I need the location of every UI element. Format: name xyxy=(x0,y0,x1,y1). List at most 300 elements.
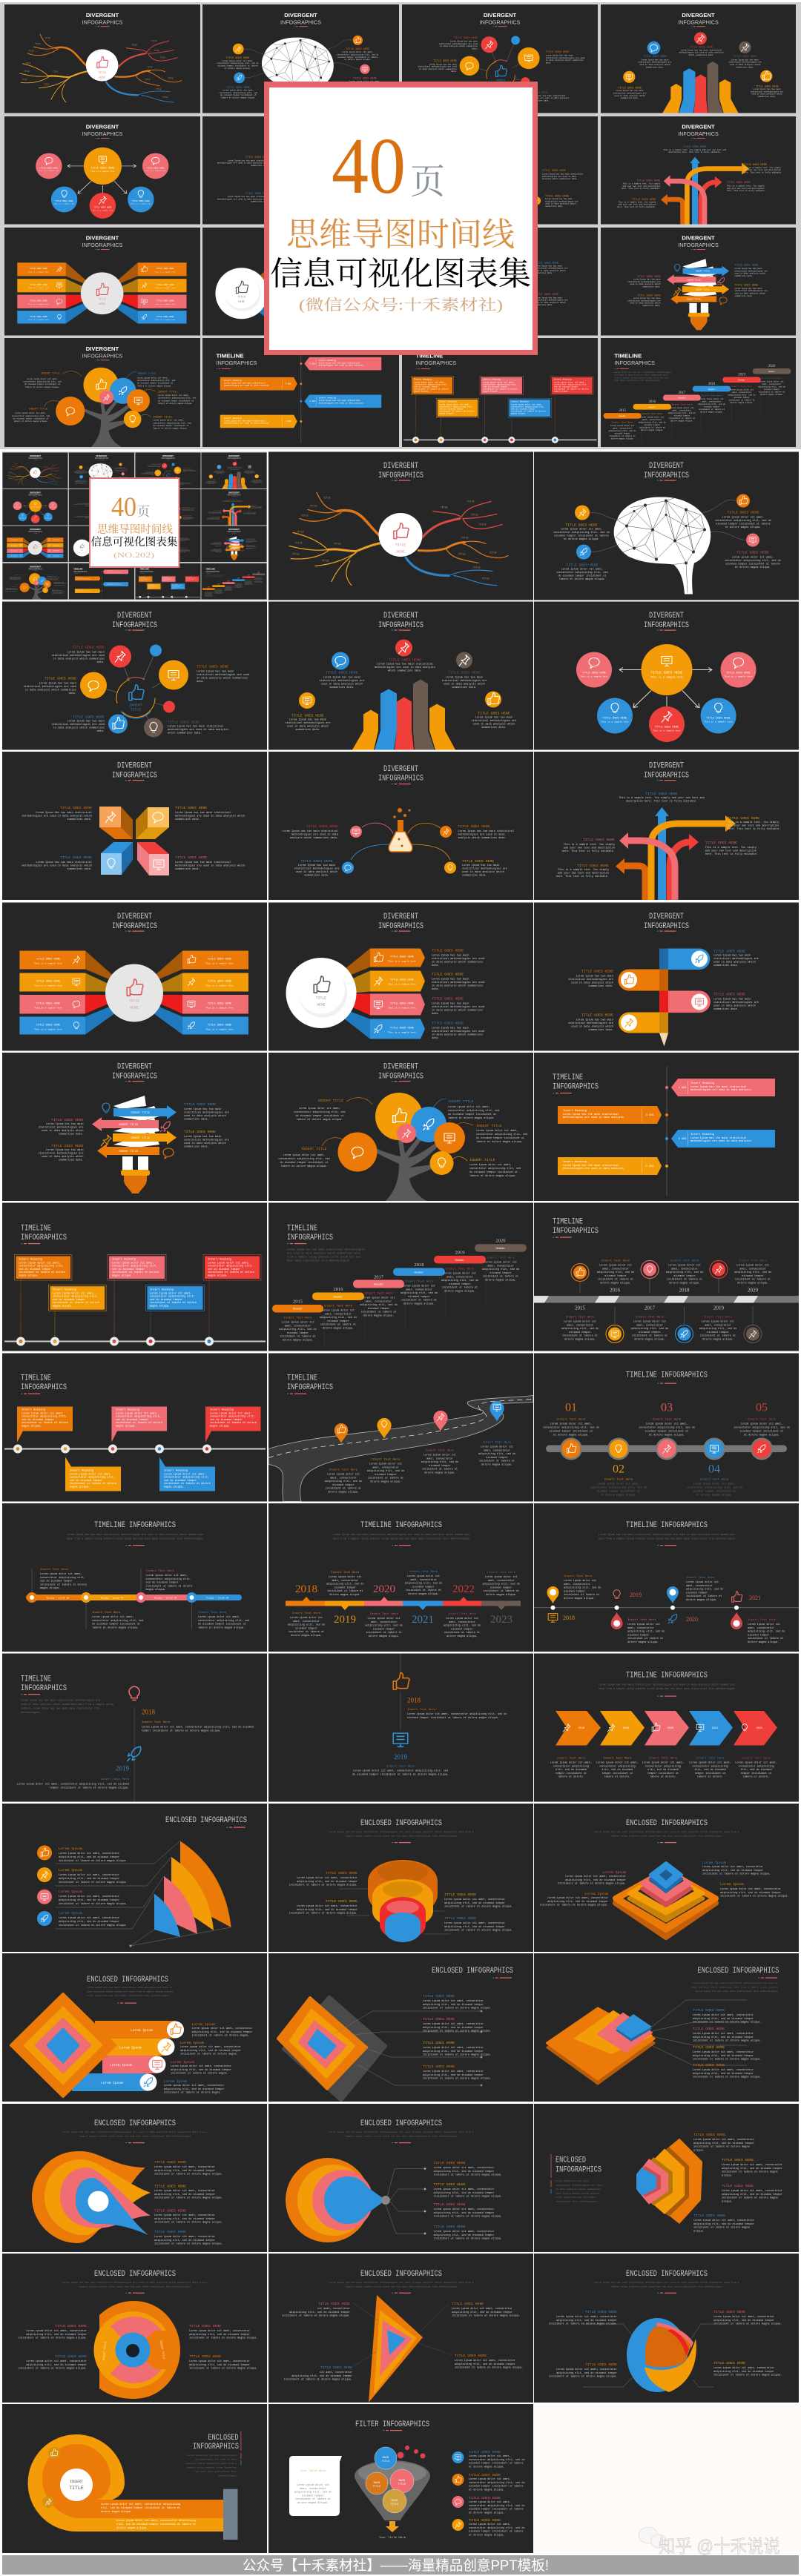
text blocks: eiusmod tempor incididunt ut xyxy=(693,1490,736,1493)
text blocks: This is a sample text. You simply add your own text and xyxy=(619,796,705,800)
text blocks xyxy=(59,1847,127,1927)
text blocks: incididunt ut labore et xyxy=(444,1631,480,1635)
panel: overview thumbnail circles xyxy=(4,116,200,224)
text blocks: Lorem Ipsum has two main xyxy=(67,651,105,654)
heading: TIMELINE xyxy=(21,1374,51,1383)
diagram: arrow bulb xyxy=(39,1096,229,1193)
years: 2016 xyxy=(334,1287,343,1292)
text blocks: et dolore magna aliqua. xyxy=(469,2511,504,2514)
heading: data from a sample using indexes xyxy=(556,2191,600,2194)
pipe xyxy=(546,1438,787,1460)
card yellow xyxy=(558,1157,662,1175)
heading xyxy=(165,1816,247,1828)
text blocks: incididunt ut labore et xyxy=(700,1334,736,1338)
filter balls: TITLE xyxy=(373,2486,380,2489)
heading xyxy=(599,1521,735,1546)
heading xyxy=(691,1967,779,1993)
speech cards: magna aliqua. xyxy=(70,1485,90,1489)
years: 2019 xyxy=(713,1305,724,1311)
text blocks: TITLE GOES HERE xyxy=(306,824,338,829)
text blocks: adipisicing elit, sed do eiusmod tempor xyxy=(289,2311,350,2314)
heading: sample using indexes Lorem Ipsum has two main data statistical this methodologies xyxy=(346,1834,457,1837)
heading: INFOGRAPHICS xyxy=(553,1082,599,1091)
text blocks: Lorem ipsum dolor sit amet, consectetur xyxy=(547,1896,608,1900)
text blocks: amet, consectetur xyxy=(636,1323,663,1327)
pointed banners: TITLE GOES HERE xyxy=(390,1027,414,1030)
text blocks xyxy=(540,1861,788,1907)
panel: slide fin layers xyxy=(2,1804,267,1952)
arrows xyxy=(92,1105,177,1158)
bar and nodes xyxy=(26,1569,242,1629)
text blocks: adipisicing elit, sed do eiusmod tempor xyxy=(693,2222,754,2226)
entry 2019: 2019 xyxy=(116,1764,129,1772)
text blocks: adipisicing elit, sed do eiusmod tempor xyxy=(423,2026,484,2030)
text blocks: labore et dolore magna aliqua. xyxy=(476,1140,523,1144)
heading: data from a sample using indexes Lorem Ipsum has two main data statistical this methodologies xyxy=(67,1537,203,1540)
bars xyxy=(72,2021,184,2091)
text blocks: incididunt ut labore et xyxy=(327,1589,363,1593)
text blocks: Lorem Ipsum has two main xyxy=(462,864,499,867)
cards: sed do eiusmod tempor xyxy=(53,1298,85,1302)
text blocks xyxy=(564,1575,785,1644)
text blocks: incididunt ut labore et dolore magna. xyxy=(180,2053,238,2056)
text blocks: Lorem ipsum dolor sit amet, consectetur xyxy=(693,2050,754,2054)
text blocks: used in data analysis which xyxy=(571,1024,613,1029)
card blue: Insert Heading xyxy=(690,1133,714,1136)
text blocks: Insert Text Here xyxy=(557,1417,586,1422)
text blocks xyxy=(24,645,249,735)
heading: INFOGRAPHICS xyxy=(378,1072,423,1081)
column texts: Lorem ipsum dolor sit xyxy=(281,1321,314,1324)
text blocks: TITLE GOES HERE xyxy=(433,2182,466,2187)
text blocks: adipisicing elit, sed do eiusmod tempor xyxy=(556,2319,617,2322)
years: 2015 xyxy=(293,1299,303,1305)
text blocks: Lorem ipsum dolor sit amet, xyxy=(732,556,774,559)
text blocks: This is a sample text. You simply xyxy=(728,821,779,824)
text blocks: eiusmod tempor xyxy=(564,1589,585,1593)
filter balls: MAIN xyxy=(383,2457,389,2460)
text blocks: Lorem Ipsum xyxy=(584,1892,608,1896)
text blocks: adipisicing elit, sed do eiusmod tempor xyxy=(189,2363,250,2367)
years xyxy=(575,1287,758,1311)
text blocks: adipisicing elit, sed do eiusmod tempor xyxy=(455,2363,515,2366)
icons and years: 2019 xyxy=(630,1592,642,1598)
panel: blank cell with watermark xyxy=(534,2404,801,2557)
panel: overview thumbnail bulb xyxy=(601,228,796,335)
text blocks xyxy=(433,2161,502,2241)
text blocks: summarizes data. xyxy=(295,728,320,732)
text blocks: do eiusmod tempor incididunt ut xyxy=(92,1623,140,1626)
text blocks: Lorem ipsum dolor sit amet, xyxy=(145,1574,188,1577)
text blocks: TITLE GOES HERE xyxy=(73,645,105,649)
years: 2018 xyxy=(295,1583,317,1595)
chevrons: 2019 xyxy=(623,1727,629,1730)
cover title line one: 思维导图时间线 xyxy=(286,216,515,253)
panel: overview thumbnail hub xyxy=(402,4,598,113)
text blocks: summarizes data. xyxy=(184,1118,209,1121)
text blocks: description here. This text is fully editable. xyxy=(626,799,697,804)
text blocks: adipisicing elit, sed do eiusmod tempor xyxy=(693,2142,754,2145)
text blocks: add your own text and description xyxy=(564,847,615,850)
text blocks: adipisicing elit, sed do eiusmod tempor xyxy=(444,1901,505,1905)
text blocks: data. xyxy=(96,660,105,664)
text blocks: incididunt ut labore et dolore magna. xyxy=(171,2072,228,2076)
heading xyxy=(644,462,689,481)
column texts: Lorem ipsum dolor sit xyxy=(444,1272,476,1275)
branch labels: TITLE xyxy=(310,504,317,507)
folded wedges xyxy=(343,949,370,1039)
panel: slide numbered pipe timeline xyxy=(534,1354,799,1502)
text blocks: data. xyxy=(432,964,440,967)
text blocks: tempor incididunt ut xyxy=(695,1772,726,1775)
text blocks: incididunt ut labore et dolore magna aliqua. xyxy=(558,1882,626,1886)
text blocks: amet, consectetur xyxy=(332,1579,358,1583)
text blocks: Insert Text Here xyxy=(627,1618,656,1622)
text blocks: TITLE GOES HERE xyxy=(713,2310,745,2314)
entry 2019: Insert Text Here xyxy=(101,1778,130,1781)
text blocks: adipisicing elit, sed do eiusmod tempor xyxy=(693,2036,754,2039)
text blocks: incididunt ut labore et dolore magna aliqua. xyxy=(433,2195,502,2199)
text blocks: consectetur adipisicing elit, sed do xyxy=(686,1486,742,1490)
heading xyxy=(595,2270,739,2294)
text blocks: statistical methodologies are used xyxy=(432,957,484,961)
icon: chat bubble watermark xyxy=(639,2527,666,2548)
text blocks: Lorem ipsum dolor sit amet, consectetur xyxy=(720,1887,781,1891)
text blocks: incididunt ut labore et dolore magna aliqua. xyxy=(433,2237,502,2241)
speech cards: Lorem ipsum dolor sit amet, xyxy=(164,1472,206,1477)
panel: overview thumbnail timeline cards xyxy=(202,338,399,447)
heading: sample using indexes Lorem Ipsum has two main data statistical this methodologies xyxy=(611,2285,722,2288)
speech cards: Lorem ipsum dolor sit amet, xyxy=(210,1411,252,1416)
text blocks: Lorem Ipsum has two main statistical xyxy=(377,663,433,666)
heading xyxy=(378,462,423,481)
column texts: eiusmod tempor xyxy=(408,1295,430,1299)
text blocks: dolore magna aliqua. xyxy=(634,1337,665,1342)
band texts: Lorem ipsum dolor sit amet, consectetur adipisicing xyxy=(101,2503,180,2506)
text blocks: consectetur adipisicing xyxy=(692,1764,728,1768)
text blocks: incididunt ut labore et dolore magna. xyxy=(191,2034,249,2038)
text blocks: amet, consectetur xyxy=(686,1584,713,1588)
entry 2018: Insert Text Here xyxy=(142,1721,171,1724)
mini cover card: 页 xyxy=(137,505,150,519)
white circle xyxy=(286,958,356,1028)
text blocks: TITLE GOES HERE xyxy=(448,670,481,675)
speech cards: incididunt ut labore et dolore xyxy=(22,1421,68,1425)
text blocks: eiusmod tempor xyxy=(375,1473,397,1477)
leader lines xyxy=(339,1889,450,1934)
spiral shape: INSERT xyxy=(70,2480,83,2484)
text blocks: incididunt ut labore et dolore magna aliqua. xyxy=(59,1859,127,1863)
panel: overview thumbnail crossing arrows xyxy=(601,116,796,224)
speech cards: incididunt ut labore et dolore xyxy=(164,1482,211,1486)
text blocks xyxy=(693,2133,782,2233)
panel: slide filter funnel xyxy=(268,2404,533,2553)
text blocks: Lorem ipsum dolor sit amet, consectetur xyxy=(556,2315,617,2319)
text blocks: incididunt ut labore et dolore magna aliqua. xyxy=(693,2076,761,2079)
panel: main cover card xyxy=(264,82,538,355)
text blocks: INSERT TITLE xyxy=(469,1158,495,1162)
branch labels: TITLE xyxy=(334,543,341,546)
text blocks: TITLE GOES HERE xyxy=(583,838,615,842)
outline icons xyxy=(101,1103,174,1159)
text blocks: Lorem ipsum dolor sit xyxy=(485,1575,518,1579)
chevrons: 2020 xyxy=(668,1727,673,1730)
column texts xyxy=(279,1256,519,1348)
text blocks: Lorem ipsum dolor sit amet, consectetur xyxy=(713,2315,774,2319)
heading: Lorem Ipsum has two main statistical methodologies are used in data analysis which summarizes data from a xyxy=(63,2130,208,2133)
text blocks: analysis which summarizes data. xyxy=(290,836,338,840)
ghost layer xyxy=(283,1997,386,2101)
text blocks: methodologies are used in data analysis xyxy=(168,728,228,732)
text blocks: TITLE GOES HERE xyxy=(423,2041,455,2045)
text blocks: adipisicing elit, sed do eiusmod tempor xyxy=(433,2234,494,2237)
column texts: eiusmod tempor xyxy=(449,1282,471,1286)
text blocks: TITLE GOES HERE xyxy=(444,1916,476,1921)
heading: data analysis which summarizes data from a sample using indexes xyxy=(87,1990,174,1993)
speech cards: Insert Heading xyxy=(210,1408,234,1411)
text blocks: incididunt ut labore et dolore magna aliqua. xyxy=(540,1904,608,1907)
text blocks: Lorem ipsum dolor sit amet, consectetur xyxy=(444,1921,505,1925)
text blocks: adipisicing elit, sed do eiusmod tempor xyxy=(26,2363,87,2367)
branch labels: TITLE xyxy=(458,553,466,556)
text blocks: labore et dolore. xyxy=(743,1775,769,1779)
banners left: TITLE GOES HERE xyxy=(36,958,60,961)
text blocks: Lorem ipsum dolor sit xyxy=(599,1263,632,1268)
arrow pink xyxy=(619,832,675,900)
cylinders xyxy=(368,1860,438,1942)
text blocks: This is a sample text. You simply xyxy=(564,843,615,847)
text blocks: adipisicing elit, sed do eiusmod tempor xyxy=(433,2211,494,2215)
text blocks: TITLE GOES HERE xyxy=(469,2518,501,2523)
branch labels: TITLE xyxy=(473,566,481,569)
speech cards: consectetur adipisicing elit, xyxy=(116,1415,161,1419)
text blocks: eiusmod tempor xyxy=(686,1591,708,1595)
text blocks: adipisicing elit, sed do xyxy=(734,1271,771,1274)
heading: Lorem Ipsum has two main statistical methodologies are used in xyxy=(693,1981,778,1984)
speech cards xyxy=(17,1407,261,1491)
panel: slide timeline boxes xyxy=(2,1202,267,1351)
text blocks: TITLE GOES HERE xyxy=(432,949,464,953)
watermark text: 知乎 @十禾说说 xyxy=(659,2537,780,2557)
icon circles xyxy=(80,645,188,737)
text blocks: TITLE GOES HERE xyxy=(645,792,678,796)
heading: FILTER INFOGRAPHICS xyxy=(355,2420,429,2429)
text blocks: labore et dolore magna aliqua. xyxy=(558,577,606,581)
text blocks: et dolore magna aliqua. xyxy=(696,1493,732,1497)
text blocks: TITLE GOES HERE xyxy=(433,2225,466,2229)
text blocks: methodologies are used in data analysis which xyxy=(175,814,245,818)
cards: magna aliqua. xyxy=(208,1274,228,1277)
text blocks: incididunt ut labore et dolore magna aliqua. xyxy=(284,2378,352,2382)
text blocks: adipisicing elit, sed do eiusmod tempor xyxy=(423,2073,484,2077)
cards: consectetur adipisicing elit, xyxy=(208,1265,253,1268)
text blocks: Insert Text Here xyxy=(739,1259,768,1263)
text blocks: adipisicing elit, sed do xyxy=(325,1480,362,1483)
bulb base xyxy=(121,1156,150,1193)
years: 2020 xyxy=(748,1287,758,1293)
text blocks: Lorem Ipsum has two main xyxy=(432,953,469,958)
text blocks: Lorem ipsum dolor sit amet, consectetur xyxy=(423,2046,484,2050)
text blocks: eiusmod tempor xyxy=(742,1274,764,1278)
text blocks: et dolore magna aliqua. xyxy=(735,566,771,569)
filter balls: MAIN xyxy=(392,2500,398,2503)
text blocks: eiusmod tempor xyxy=(627,1633,649,1637)
heading: two main data statistical this xyxy=(195,2470,237,2473)
text blocks: adipisicing elit, sed do eiusmod tempor xyxy=(171,2068,231,2072)
text blocks: adipisicing elit, sed do xyxy=(561,1327,599,1331)
cards: sed do eiusmod tempor xyxy=(19,1268,51,1271)
card yellow: 4 AUG xyxy=(646,1165,653,1168)
text blocks: dolore magna aliqua. xyxy=(600,1281,631,1285)
panel: slide swirl teardrops xyxy=(2,2104,267,2252)
heading xyxy=(595,1819,739,1843)
heading: INFOGRAPHICS xyxy=(112,922,157,931)
text blocks: adipisicing elit, sed do eiusmod tempor xyxy=(291,2374,352,2378)
text blocks: adipisicing elit, sed do xyxy=(482,1583,520,1586)
heading: TIMELINE INFOGRAPHICS xyxy=(360,1521,442,1530)
text blocks: eiusmod tempor incididunt ut labore xyxy=(469,2462,524,2466)
panel: slide winding road xyxy=(268,1354,533,1502)
vertical line and icons xyxy=(127,1686,141,1801)
panel: slide chevrons xyxy=(534,1653,799,1801)
text blocks xyxy=(22,806,245,871)
text blocks: adipisicing elit, sed do eiusmod tempor xyxy=(433,2170,494,2173)
intro paragraph: Lorem Ipsum has two main statistical methodologies xyxy=(287,1248,365,1251)
column texts: adipisicing elit, sed do xyxy=(400,1291,438,1295)
text blocks: incididunt ut labore et dolore magna xyxy=(693,2145,750,2149)
panel: overview thumbnail mind map xyxy=(4,4,200,113)
text blocks: et dolore magna aliqua. xyxy=(469,2465,504,2469)
heading: INFOGRAPHICS xyxy=(193,2443,239,2451)
text blocks: amet, consectetur xyxy=(564,1583,590,1586)
stair pills: Header xyxy=(293,1308,303,1311)
entry 2018: Insert Text Here xyxy=(407,1708,436,1712)
text blocks: used in data analysis which xyxy=(462,870,504,874)
text blocks: Lorem Ipsum has two main xyxy=(39,682,76,685)
column texts: adipisicing elit, sed do xyxy=(320,1316,357,1320)
heading xyxy=(644,612,689,631)
text blocks: TITLE GOES HERE xyxy=(423,2017,455,2022)
text blocks: TITLE GOES HERE xyxy=(51,1118,84,1122)
heading: DIVERGENT xyxy=(383,1063,418,1072)
cards: incididunt ut labore et dolore xyxy=(112,1271,159,1274)
text blocks: Lorem Ipsum has two main statistical xyxy=(175,811,231,815)
panel: slide cone layers xyxy=(268,2104,533,2252)
text blocks: methodologies are used in data analysis xyxy=(375,666,435,669)
center ring xyxy=(116,678,155,718)
diagram: crossing arrows xyxy=(556,792,780,900)
nested diamonds xyxy=(11,1994,115,2096)
text blocks: TITLE GOES HERE xyxy=(184,1102,216,1107)
column texts: amet, consectetur xyxy=(366,1299,392,1303)
text blocks: Lorem Ipsum xyxy=(602,1870,626,1875)
text blocks: summarizes data. xyxy=(713,1007,739,1011)
text blocks: incididunt ut labore et dolore magna aliqua. xyxy=(154,2196,222,2200)
text blocks: INSERT TITLE xyxy=(448,1099,474,1104)
center circle xyxy=(378,513,423,557)
text blocks: This is a sample text. You simply xyxy=(705,846,756,850)
arrow blue xyxy=(655,807,669,900)
text blocks: Insert Text Here xyxy=(198,1611,227,1615)
column texts: dolore magna aliqua. xyxy=(403,1302,435,1306)
text blocks: Lorem Ipsum has two main xyxy=(46,1148,83,1152)
text blocks: adipisicing elit, sed do eiusmod tempor xyxy=(189,2333,250,2337)
text blocks: TITLE GOES HERE xyxy=(423,2065,455,2069)
entry 2019: do eiusmod tempor incididunt ut labore et dolore magna aliqua. xyxy=(352,1773,449,1776)
text blocks xyxy=(40,1568,249,1629)
text blocks: adipisicing elit, sed do xyxy=(686,1588,723,1592)
text blocks: Lorem ipsum dolor sit amet, xyxy=(693,1483,735,1486)
cards: consectetur adipisicing elit, xyxy=(112,1265,157,1268)
band texts: elit, sed do eiusmod tempor incididunt ut labore et xyxy=(116,2523,196,2526)
panel: slide stair timeline xyxy=(268,1202,533,1351)
panel: slide sphere section xyxy=(534,2254,799,2403)
heading xyxy=(185,2431,241,2477)
card pink: methodologies are used in data analysis xyxy=(690,1088,751,1092)
text blocks: dolore magna aliqua. xyxy=(291,1634,322,1638)
heading: INFOGRAPHICS xyxy=(644,471,689,480)
heading xyxy=(67,1521,203,1546)
years: 2022 xyxy=(452,1583,475,1595)
text blocks: Lorem Ipsum has two main xyxy=(475,716,512,719)
icon circles xyxy=(37,1845,52,1926)
text blocks: consectetur adipisicing elit, sed do xyxy=(715,519,771,523)
text blocks: incididunt ut labore et dolore magna aliqua. xyxy=(423,2077,491,2081)
text blocks: tempor incididunt ut xyxy=(601,1772,633,1775)
stair pills: Header xyxy=(334,1296,343,1299)
text blocks: TITLE GOES HERE xyxy=(693,2063,725,2067)
text blocks: aliqua. xyxy=(722,2199,733,2203)
heading: sample using indexes Lorem Ipsum has two main data statistical this methodologies xyxy=(346,2135,457,2138)
text blocks xyxy=(693,2008,761,2079)
text blocks: dolore magna aliqua. xyxy=(627,1640,659,1644)
text blocks: adipisicing elit, sed do xyxy=(748,1630,785,1634)
text blocks xyxy=(282,2302,523,2382)
text blocks: TITLE GOES HERE xyxy=(184,1130,216,1134)
heading: DIVERGENT xyxy=(383,913,418,921)
text blocks: summarizes data. xyxy=(329,686,355,689)
text blocks: dolore magna aliqua. xyxy=(564,1597,595,1600)
column texts: incididunt ut labore et xyxy=(442,1286,478,1290)
icon circles xyxy=(299,639,501,709)
text blocks: incididunt ut labore et dolore magna aliqua. xyxy=(693,2058,761,2062)
text blocks: Lorem ipsum dolor sit amet, consectetur xyxy=(191,2027,252,2030)
column texts: Lorem ipsum dolor sit xyxy=(403,1284,435,1288)
cards: magna aliqua. xyxy=(112,1274,132,1277)
text blocks: aliqua. xyxy=(693,2148,705,2152)
column texts: Lorem ipsum dolor sit xyxy=(484,1260,517,1265)
text blocks: Insert Text Here xyxy=(557,1757,586,1760)
text blocks: adipisicing elit, sed do eiusmod tempor xyxy=(722,2193,782,2196)
text blocks xyxy=(19,2324,257,2371)
text blocks: Lorem ipsum dolor sit amet, consectetur xyxy=(693,2138,754,2142)
text blocks: incididunt ut labore et dolore magna aliqua. xyxy=(455,2366,523,2370)
text blocks: adipisicing elit, sed do xyxy=(421,1460,458,1464)
text blocks: statistical methodologies are xyxy=(568,978,613,981)
text blocks: Lorem Ipsum has two main xyxy=(184,1135,221,1139)
heading: INFOGRAPHICS xyxy=(287,1383,333,1392)
text blocks: incididunt ut labore et dolore magna aliqua. xyxy=(720,1895,788,1898)
heading: sample using indexes Lorem Ipsum has two main data statistical this methodologies xyxy=(346,2285,457,2288)
heading: Lorem Ipsum has two main statistical methodologies are used in data analysis which summarizes xyxy=(599,1683,735,1686)
text blocks: INSERT TITLE xyxy=(317,1099,343,1103)
text blocks: Lorem ipsum dolor sit amet, xyxy=(469,2454,511,2458)
segmented bar xyxy=(286,1597,521,1610)
heading: Lorem Ipsum has two main xyxy=(556,2179,589,2182)
text blocks: TITLE GOES HERE xyxy=(444,1893,476,1897)
panel: slide stacked diamonds xyxy=(534,1804,799,1952)
text blocks: eiusmod tempor xyxy=(332,1483,355,1487)
